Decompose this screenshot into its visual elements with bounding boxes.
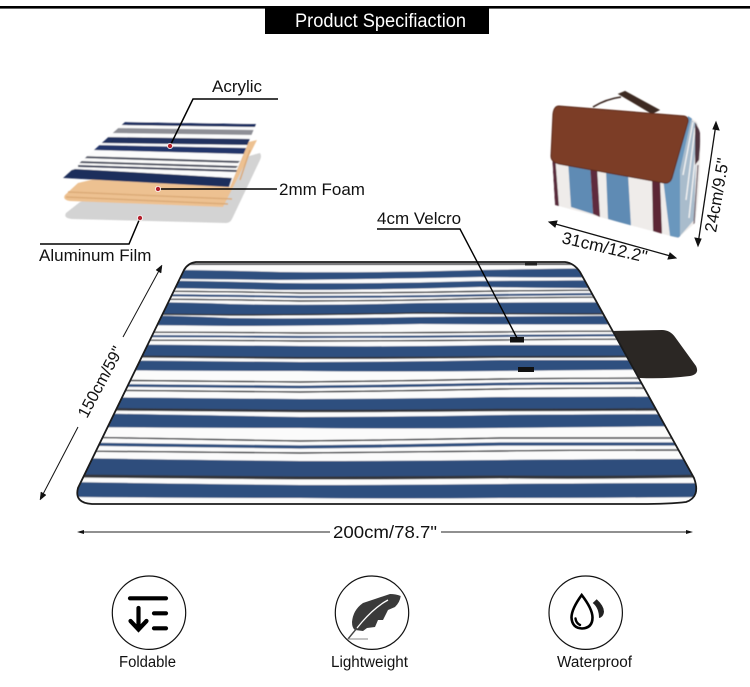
label: Acrylic — [167, 77, 278, 149]
layer: acrylic fabric — [62, 121, 256, 188]
label: Aluminum Film — [39, 215, 151, 265]
dimension: 200cm — [77, 522, 693, 542]
dimension: 200cm: 200cm/78.7" — [333, 522, 437, 542]
layered material diagram — [55, 118, 261, 223]
label: 2mm Foam: 2mm Foam — [279, 180, 365, 199]
thin stripe groups — [70, 289, 705, 453]
feature: Lightweight: Lightweight — [331, 654, 409, 671]
layer: aluminum film — [65, 153, 261, 223]
top rule — [0, 6, 750, 9]
rolled mat — [545, 92, 705, 245]
velcro tabs — [510, 262, 537, 372]
icon: fold list — [130, 598, 166, 630]
brown flap — [551, 106, 688, 183]
feature: Foldable: Foldable — [119, 654, 176, 671]
dimension: 31cm: 31cm/12.2" — [560, 228, 649, 266]
flap on mat — [610, 330, 697, 378]
feature: Foldable — [112, 576, 186, 671]
feature: Lightweight — [331, 576, 409, 671]
icon: water drops — [572, 595, 604, 628]
title banner — [265, 6, 489, 34]
dimension: 150cm — [40, 265, 162, 500]
dimension: 31cm — [549, 221, 676, 266]
feature: Waterproof — [549, 576, 633, 671]
label: 4cm Velcro: 4cm Velcro — [377, 209, 461, 228]
dimension: 150cm: 150cm/59" — [75, 343, 127, 421]
dimension: 24cm: 24cm/9.5" — [701, 157, 733, 234]
dark stripe shadows — [70, 313, 705, 478]
label: 4cm Velcro — [377, 209, 517, 338]
feature: Waterproof: Waterproof — [557, 654, 633, 671]
label: Acrylic: Acrylic — [212, 77, 263, 96]
dimension: 24cm — [695, 122, 733, 246]
label: 2mm Foam — [155, 180, 365, 199]
picnic mat — [70, 258, 705, 508]
stripes — [70, 263, 705, 498]
mat edge — [77, 262, 696, 504]
label: Aluminum Film: Aluminum Film — [39, 246, 151, 265]
title banner: Product Specifiaction — [295, 11, 466, 32]
rolled fabric — [552, 116, 701, 238]
handle — [593, 97, 621, 107]
layer: foam — [64, 140, 257, 207]
icon: feather — [348, 594, 401, 639]
